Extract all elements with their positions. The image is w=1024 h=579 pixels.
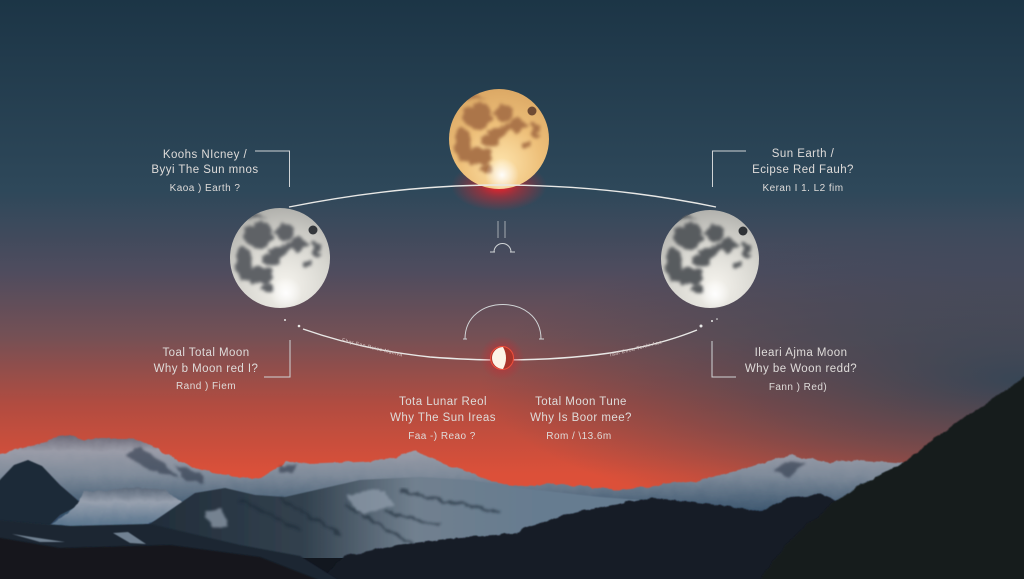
label: lower left: Rand ) Fiem	[176, 381, 236, 392]
small labels on lower arc, left: Fhqr Ean Ruies Mamva	[341, 338, 403, 359]
label: lower right: Why be Woon redd?	[745, 363, 857, 375]
bracket: upper right	[712, 151, 746, 187]
back snow range	[0, 435, 905, 560]
upper orbit arc	[289, 185, 716, 207]
label: upper right: Ecipse Red Fauh?	[752, 164, 854, 176]
bracket: lower left	[264, 340, 290, 377]
label: upper left: Koohs NIcney /	[163, 149, 247, 161]
dark middle ridge	[300, 495, 900, 579]
back range rock shading	[125, 446, 805, 484]
label: lower right	[745, 347, 857, 393]
eclipse moon	[480, 336, 524, 380]
label: lower left: Why b Moon red I?	[154, 363, 258, 375]
foreground hills	[0, 537, 370, 579]
label: upper left: Byyi The Sun mnos	[151, 164, 259, 176]
central snow mountain	[150, 477, 640, 560]
label: lower right: Ileari Ajma Moon	[755, 347, 847, 359]
central snow highlights	[205, 488, 395, 528]
moon: right, grey	[661, 210, 759, 309]
label: bottom centre right: Total Moon Tune	[535, 396, 627, 408]
near-left dark ground	[0, 520, 370, 579]
snow patches	[12, 532, 146, 544]
orbit dots, right	[700, 318, 718, 328]
dark left peak	[0, 460, 82, 525]
small arc above eclipse	[463, 304, 544, 339]
label: bottom centre right: Why Is Boor mee?	[530, 412, 632, 424]
label: lower left	[154, 347, 258, 392]
label: lower right: Fann ) Red)	[769, 382, 827, 393]
moon: left, grey	[230, 208, 330, 309]
label: bottom centre left: Tota Lunar Reol	[399, 396, 487, 408]
label: bottom centre right	[530, 396, 632, 442]
right dark mountainside	[745, 365, 1024, 579]
central phase icon	[490, 221, 515, 252]
bracket: lower right	[712, 341, 736, 377]
base dark ground	[0, 558, 1024, 579]
red glow under top moon	[451, 161, 547, 211]
label: upper left: Kaoa ) Earth ?	[170, 183, 240, 194]
label: upper right: Keran I 1. L2 fim	[762, 183, 844, 194]
small labels on lower arc, right: Taal Eeoa Tenki Aae	[608, 339, 663, 359]
label: bottom centre left	[390, 396, 496, 442]
lower orbit arc	[303, 329, 697, 360]
label: upper right	[752, 148, 854, 194]
label: bottom centre left: Faa -) Reao ?	[408, 431, 476, 442]
moon: top, copper	[449, 89, 549, 192]
label: upper right: Sun Earth /	[772, 148, 835, 160]
label: upper left	[151, 149, 259, 194]
label: lower left: Toal Total Moon	[162, 347, 250, 359]
central rock streaks	[240, 490, 500, 548]
lower left snow slope	[50, 488, 185, 528]
label: bottom centre right: Rom / \13.6m	[546, 431, 612, 442]
mountain landscape	[0, 365, 1024, 579]
label: bottom centre left: Why The Sun Ireas	[390, 412, 496, 424]
orbit dots, left	[284, 319, 300, 327]
bracket: upper left	[255, 151, 290, 187]
